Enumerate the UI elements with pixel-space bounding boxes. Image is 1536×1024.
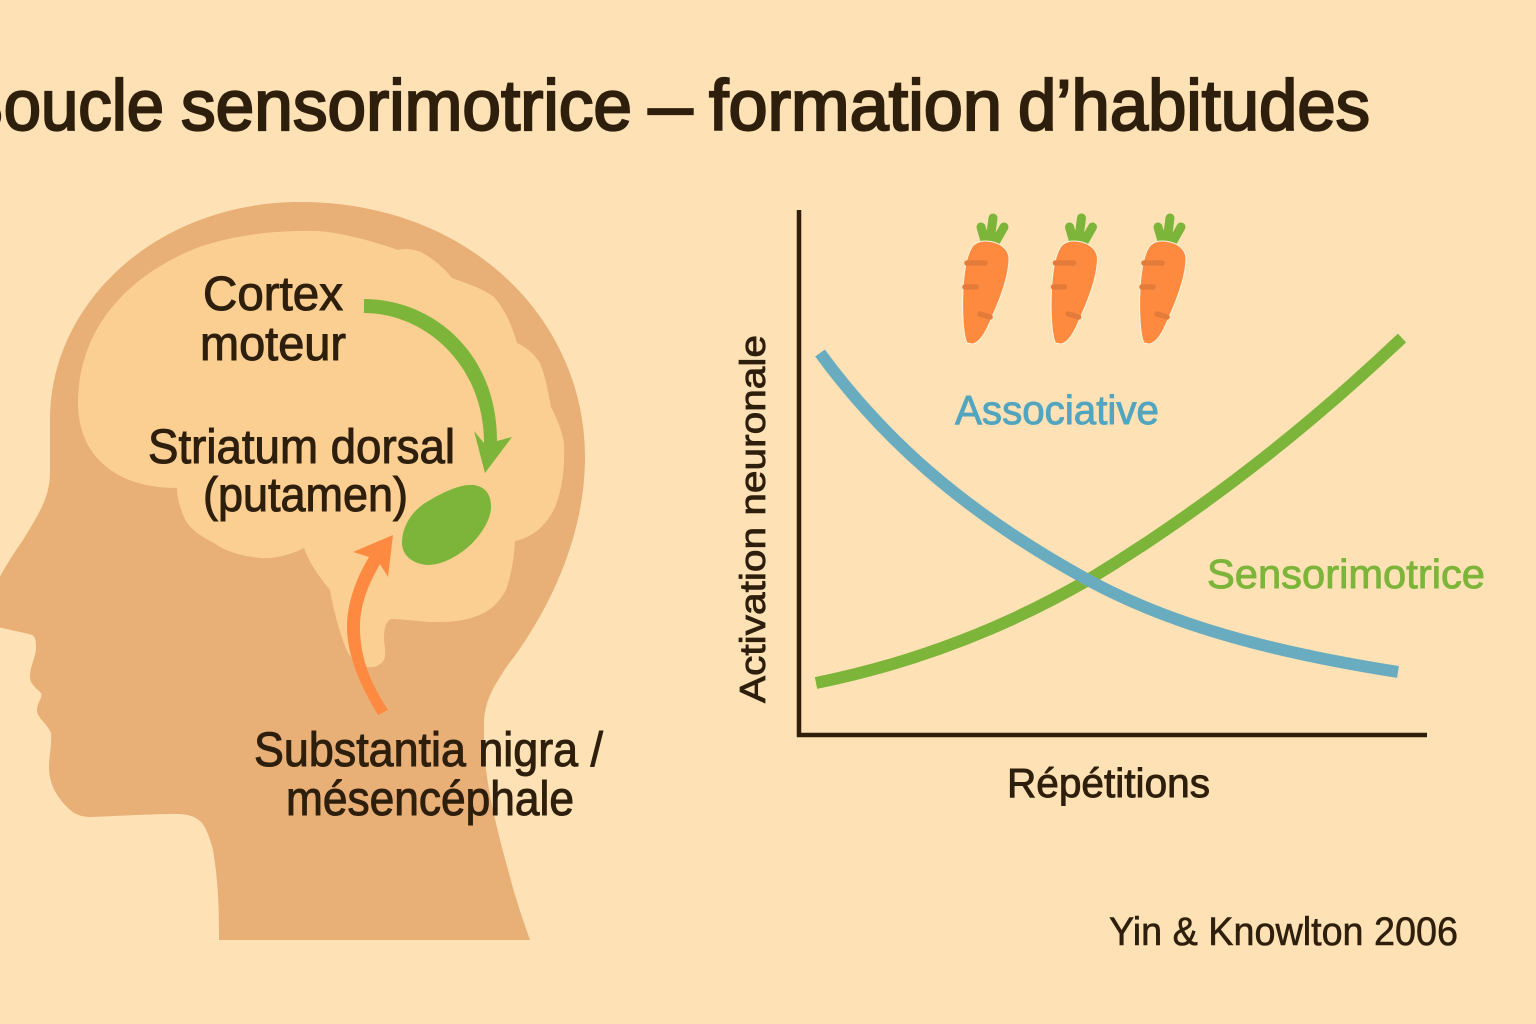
label: sensorimotrice: Sensorimotrice: [1207, 551, 1485, 597]
arrow: cortex to striatum: [364, 299, 512, 473]
label: striatum dorsal: [148, 421, 455, 522]
label: striatum dorsal: Striatum dorsal: [148, 421, 455, 474]
head diagram: [0, 202, 604, 940]
chart axes: [799, 210, 1427, 735]
citation: Yin & Knowlton 2006: [1109, 910, 1458, 954]
icon: carrot 3: [1140, 218, 1186, 344]
label: associative: Associative: [955, 387, 1159, 433]
line chart: [732, 210, 1485, 806]
icon: carrot 1: [963, 218, 1009, 344]
label: substantia nigra: Substantia nigra /: [254, 724, 604, 777]
title: formation: [709, 67, 1002, 146]
label: substantia nigra: mésencéphale: [286, 773, 574, 826]
label: cortex moteur: Cortex: [203, 268, 343, 321]
putamen: [402, 485, 491, 565]
curve: sensorimotrice: [816, 338, 1402, 683]
brain: [78, 231, 564, 667]
icon: carrot 2: [1051, 218, 1098, 344]
label: striatum dorsal: (putamen): [203, 469, 408, 522]
title: [0, 67, 1370, 146]
y-axis label: Activation neuronale: [732, 335, 773, 703]
x-axis label: Répétitions: [1007, 760, 1210, 806]
title: sensorimotrice: [181, 67, 632, 146]
title: d’habitudes: [1018, 67, 1370, 146]
curve: associative: [820, 353, 1398, 672]
label: cortex moteur: [200, 268, 346, 371]
head silhouette: [0, 202, 585, 940]
label: substantia nigra: [254, 724, 604, 826]
arrow: substantia nigra to striatum: [347, 535, 393, 715]
title: —: [648, 67, 693, 146]
label: cortex moteur: moteur: [200, 318, 346, 371]
